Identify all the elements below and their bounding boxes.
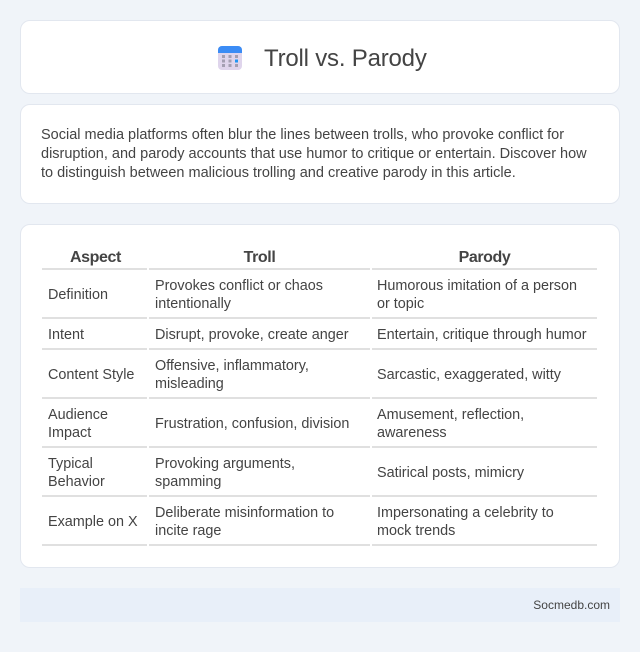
row: typical behavior (48, 456, 105, 490)
header: aspect: Aspect (70, 249, 121, 266)
intro text: to distinguish between malicious trolling and creative parody in this article. (41, 165, 516, 181)
comparison table: Humorous imitation of a person (377, 278, 577, 294)
comparison table: Disrupt, provoke, create anger (155, 327, 349, 343)
comparison table: Impersonating a celebrity to (377, 505, 554, 521)
comparison table: Entertain, critique through humor (377, 327, 587, 343)
footer bar (20, 588, 620, 622)
intro text: Social media platforms often blur the lines between trolls, who provoke conflict for (41, 127, 564, 143)
comparison table: spamming (155, 474, 221, 490)
row: example on x: Example on X (48, 514, 138, 530)
row: content style: Content Style (48, 367, 134, 383)
comparison table: Offensive, inflammatory, (155, 358, 309, 374)
comparison table: Deliberate misinformation to (155, 505, 334, 521)
comparison table: Provoking arguments, (155, 456, 295, 472)
row: typical behavior: Typical (48, 456, 93, 472)
heading: Troll vs. Parody (264, 45, 427, 72)
comparison table (42, 249, 597, 546)
comparison table: incite rage (155, 523, 221, 539)
header: parody: Parody (459, 249, 510, 266)
comparison table: or topic (377, 296, 424, 312)
comparison table: misleading (155, 376, 224, 392)
icon: calendar (218, 46, 242, 70)
comparison table: Provokes conflict or chaos (155, 278, 323, 294)
comparison table: awareness (377, 425, 447, 441)
row: typical behavior: Behavior (48, 474, 105, 490)
header: troll: Troll (244, 249, 275, 266)
comparison table: Frustration, confusion, division (155, 416, 349, 432)
comparison table: Amusement, reflection, (377, 407, 524, 423)
row: definition: Definition (48, 287, 108, 303)
row: audience impact: Audience (48, 407, 108, 423)
comparison table: mock trends (377, 523, 455, 539)
row: intent: Intent (48, 327, 84, 343)
row: audience impact: Impact (48, 425, 91, 441)
intro text (41, 127, 587, 181)
row: audience impact (48, 407, 108, 441)
comparison table: Sarcastic, exaggerated, witty (377, 367, 561, 383)
intro text: disruption, and parody accounts that use humor to critique or entertain. Discover how (41, 146, 587, 162)
title panel (20, 20, 620, 94)
comparison table: Satirical posts, mimicry (377, 465, 524, 481)
footer text: Socmedb.com (533, 598, 610, 612)
table panel (20, 224, 620, 568)
intro panel (20, 104, 620, 204)
comparison table: intentionally (155, 296, 231, 312)
